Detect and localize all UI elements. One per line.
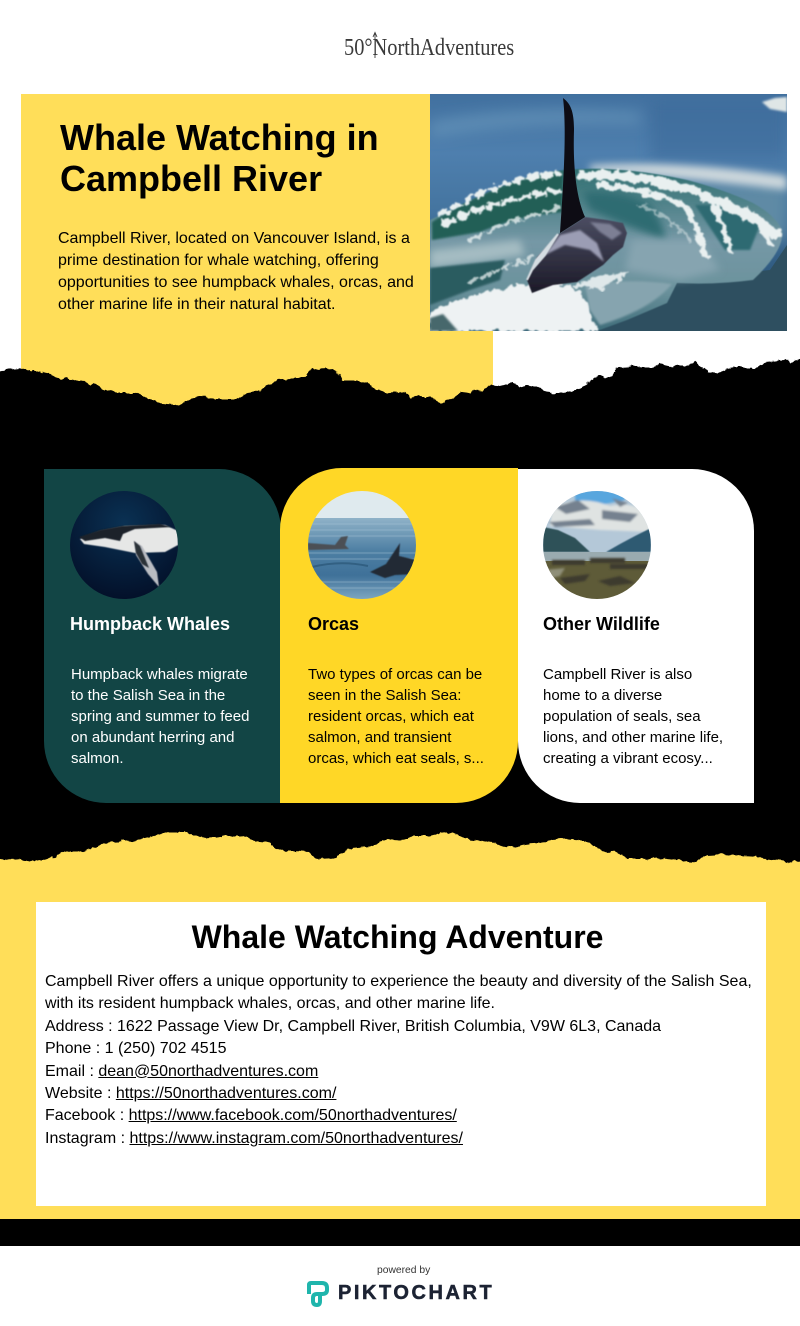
hero title bbox=[60, 117, 379, 198]
foam arcs bbox=[440, 174, 776, 282]
description: Humpback whales migrate bbox=[71, 666, 248, 683]
description: to the Salish Sea in the bbox=[71, 687, 225, 704]
contact text: with its resident humpback whales, orcas, and other marine life. bbox=[45, 995, 495, 1012]
contact text: Facebook : https://www.facebook.com/50northadventures/ bbox=[45, 1107, 457, 1124]
heading: Orcas bbox=[308, 614, 359, 634]
hero description: Campbell River, located on Vancouver Island, is a bbox=[58, 230, 410, 246]
torn yellow lower section bbox=[0, 831, 800, 1219]
contact text: Phone : 1 (250) 702 4515 bbox=[45, 1040, 226, 1057]
description: salmon, and transient bbox=[308, 729, 451, 746]
black footer strip bbox=[0, 1219, 800, 1246]
panel: Other Wildlife bbox=[518, 469, 754, 803]
description: salmon. bbox=[71, 750, 124, 767]
hero photo: orca fin in a wave bbox=[430, 94, 787, 331]
description: creating a vibrant ecosy... bbox=[543, 750, 713, 767]
description bbox=[543, 666, 723, 767]
panel: Humpback Whales bbox=[44, 469, 281, 803]
icon: Piktochart logo bbox=[307, 1281, 329, 1307]
panel: Whale Watching Adventure bbox=[36, 902, 766, 1206]
interior shades bbox=[583, 192, 665, 240]
photo: lake landscape bbox=[543, 491, 651, 599]
description: Campbell River is also bbox=[543, 666, 692, 683]
description: on abundant herring and bbox=[71, 729, 234, 746]
contact text: Campbell River offers a unique opportunity to experience the beauty and diversity of the Salish Sea, bbox=[45, 973, 752, 990]
torn black band bbox=[0, 358, 800, 864]
description: orcas, which eat seals, s... bbox=[308, 750, 484, 767]
contact text: Email : dean@50northadventures.com bbox=[45, 1063, 318, 1080]
heading: Other Wildlife bbox=[543, 614, 660, 634]
contact text: Instagram : https://www.instagram.com/50northadventures/ bbox=[45, 1130, 463, 1147]
description: spring and summer to feed bbox=[71, 708, 249, 725]
hero description: opportunities to see humpback whales, orcas, and bbox=[58, 274, 414, 291]
contact text bbox=[45, 973, 752, 1147]
description: seen in the Salish Sea: bbox=[308, 687, 461, 704]
hero description bbox=[58, 230, 414, 313]
contact text: Website : https://50northadventures.com/ bbox=[45, 1085, 336, 1102]
whale back bbox=[527, 217, 627, 293]
heading: Humpback Whales bbox=[70, 614, 230, 634]
description: home to a diverse bbox=[543, 687, 662, 704]
description: lions, and other marine life, bbox=[543, 729, 723, 746]
hero yellow panel bbox=[21, 94, 493, 414]
description: Two types of orcas can be bbox=[308, 666, 482, 683]
hero title: Whale Watching in bbox=[60, 117, 379, 158]
lower dark water bbox=[590, 245, 787, 331]
hero description: other marine life in their natural habitat. bbox=[58, 296, 335, 313]
description bbox=[308, 666, 484, 767]
white splash bottom bbox=[430, 282, 597, 331]
contact text: Address : 1622 Passage View Dr, Campbell River, British Columbia, V9W 6L3, Canada bbox=[45, 1018, 661, 1035]
wave body bbox=[430, 169, 782, 331]
hero description: prime destination for whale watching, offering bbox=[58, 252, 379, 269]
description bbox=[71, 666, 249, 767]
heading: Whale Watching Adventure bbox=[192, 919, 603, 955]
hero title: Campbell River bbox=[60, 158, 322, 198]
upper-left green wave face bbox=[432, 172, 563, 240]
panel: Orcas bbox=[280, 468, 518, 803]
photo: orcas at sea bbox=[308, 491, 416, 599]
dorsal fin bbox=[560, 98, 585, 233]
description: population of seals, sea bbox=[543, 708, 701, 725]
Piktochart wordmark: PIKTOCHART bbox=[338, 1282, 494, 1304]
photo: humpback whale bbox=[70, 491, 178, 599]
description: resident orcas, which eat bbox=[308, 708, 474, 725]
logo: 50 North Adventures: 50°NorthAdventures bbox=[344, 35, 514, 61]
powered by text: powered by bbox=[377, 1265, 430, 1276]
